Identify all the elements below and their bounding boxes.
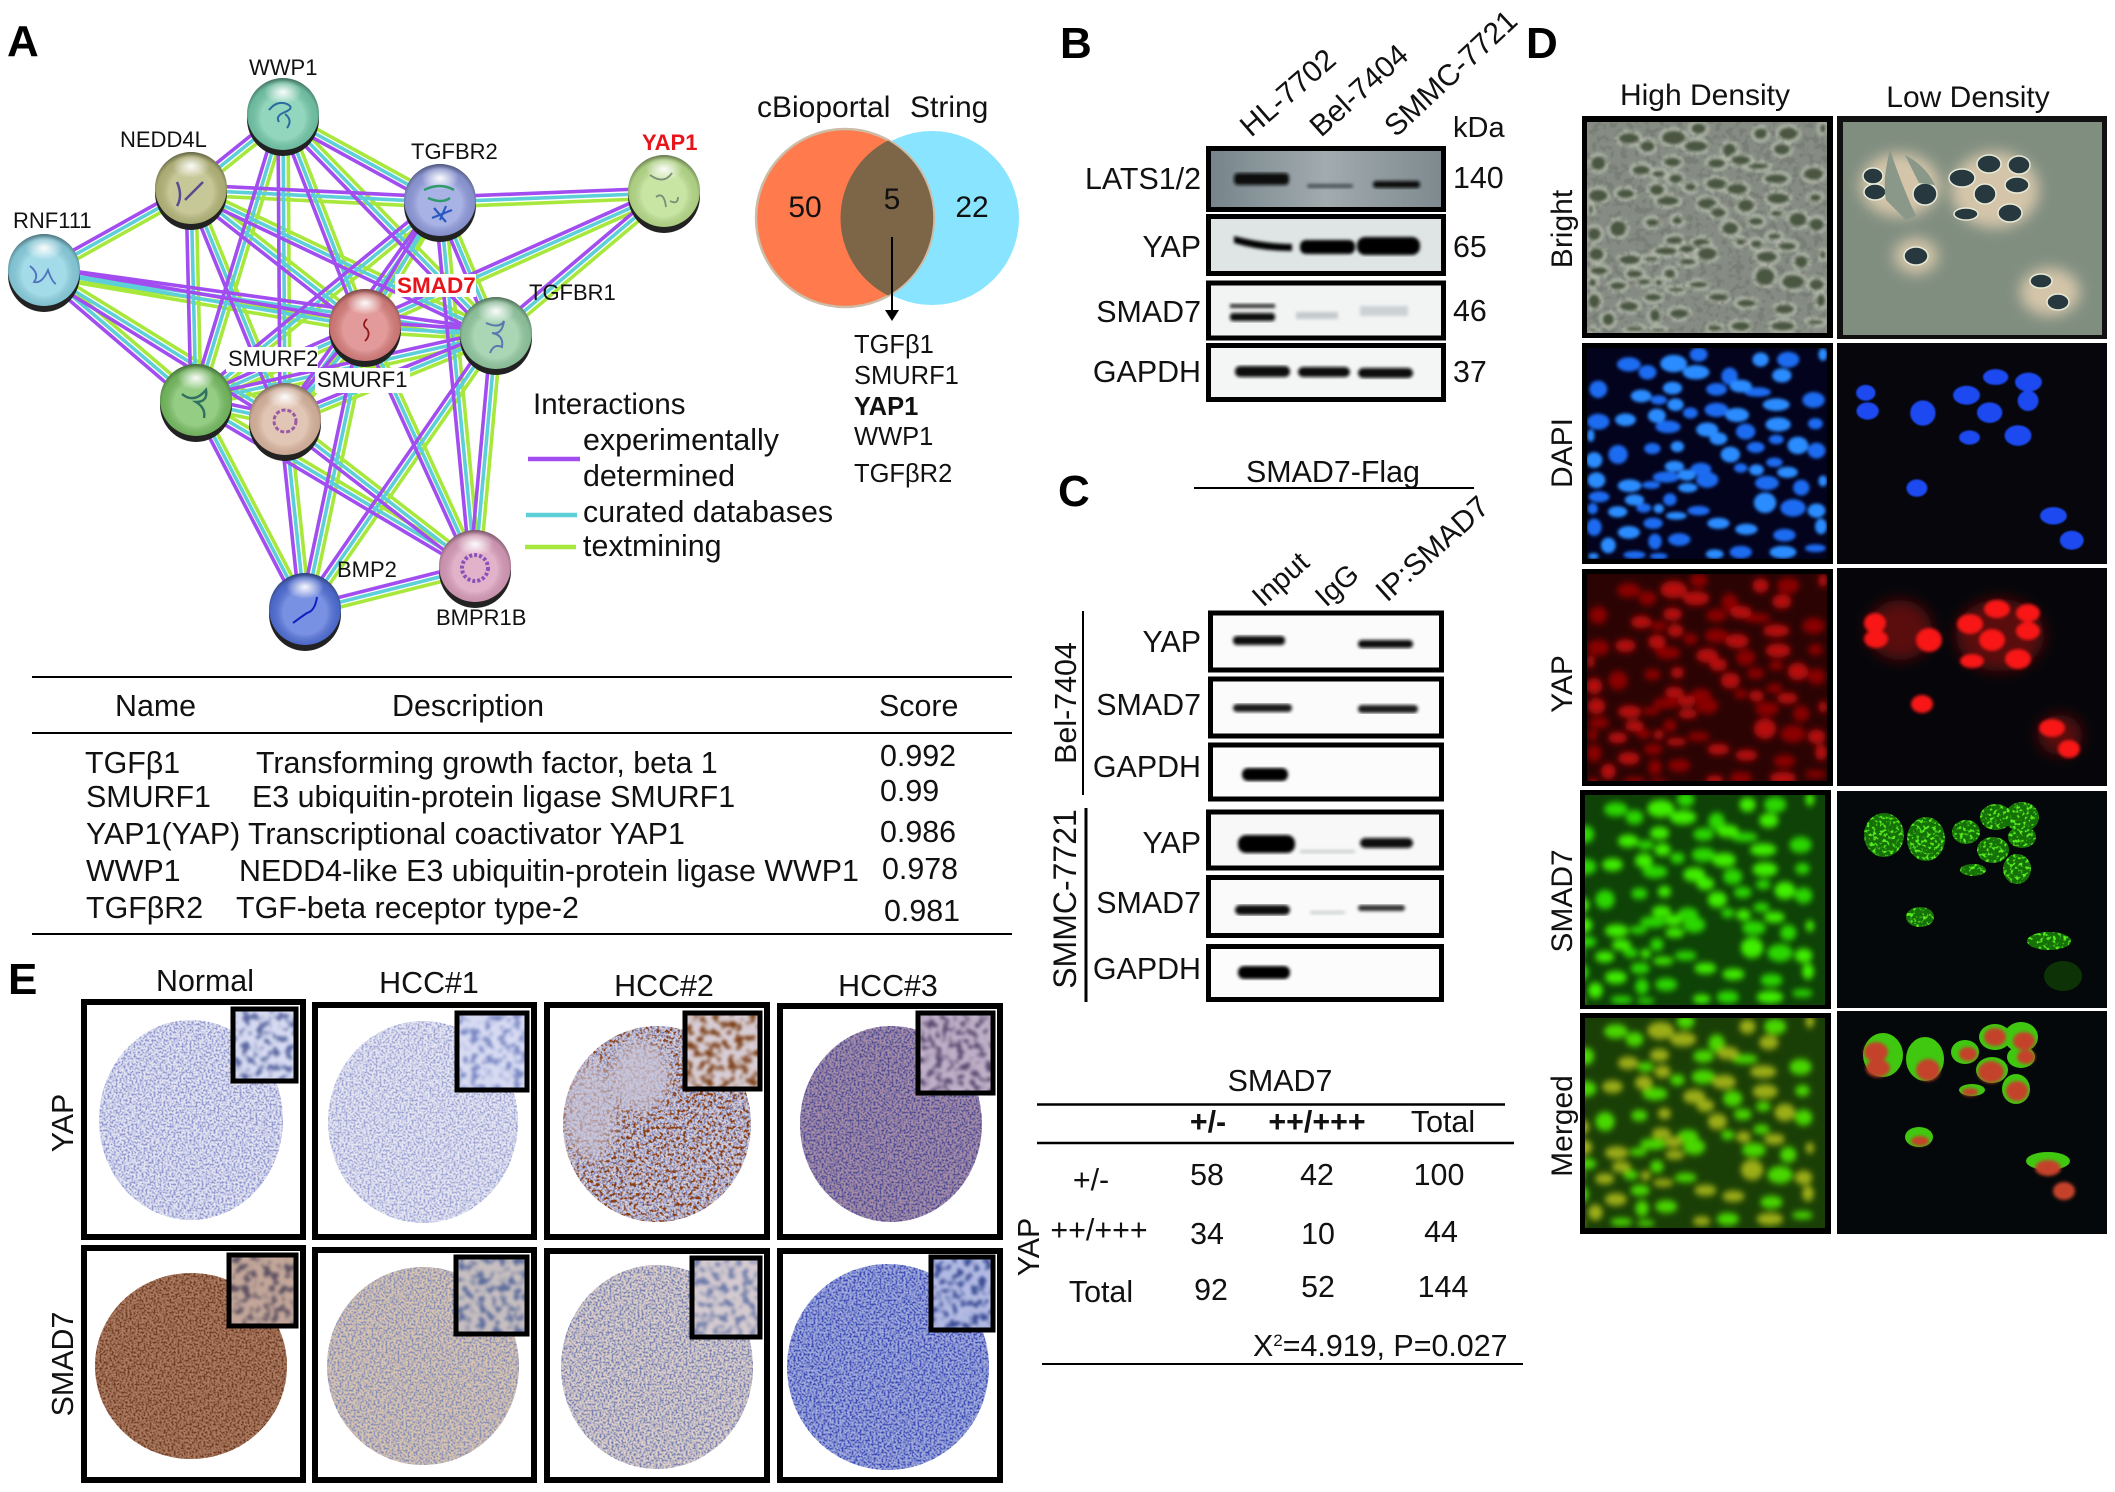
tissue SMAD7 Normal — [84, 1248, 303, 1480]
inset — [229, 1255, 296, 1326]
legend: interactions: textmining — [583, 529, 722, 563]
blot GAPDH: 37 — [1453, 355, 1487, 389]
table: protein name, description, score: TGFβ1 — [85, 746, 180, 780]
lane labels: HL-7702 — [1234, 43, 1342, 143]
Venn diagram: cBioportal — [757, 91, 890, 124]
contingency table: YAP vs SMAD7: ++/+++ — [1050, 1213, 1148, 1247]
tissue YAP HCC#1 — [315, 1005, 534, 1237]
blot Bel-7404 GAPDH — [1093, 745, 1442, 799]
contingency table: YAP vs SMAD7: 52 — [1301, 1270, 1335, 1304]
row labels: Merged — [1546, 1075, 1579, 1177]
column headers: HCC#3 — [838, 969, 938, 1003]
contingency table: YAP vs SMAD7: 10 — [1301, 1217, 1335, 1251]
row labels: YAP — [46, 1094, 80, 1152]
inset — [685, 1013, 760, 1089]
tissue SMAD7 HCC#2 — [547, 1251, 767, 1480]
node labels: SMURF2 — [228, 346, 318, 371]
contingency table: YAP vs SMAD7: +/- — [1190, 1105, 1226, 1139]
node labels: BMP2 — [337, 557, 397, 582]
blot Bel-7404 GAPDH: GAPDH — [1093, 750, 1201, 784]
lane labels: Input — [1246, 546, 1316, 613]
table: protein name, description, score: 0.99 — [880, 774, 939, 808]
node labels: WWP1 — [249, 55, 317, 80]
image: SMAD7 low density — [1837, 791, 2107, 1008]
image: merged low density — [1837, 1011, 2107, 1234]
table: protein name, description, score: YAP1(YAP) — [86, 817, 240, 851]
lane labels: IP:SMAD7 — [1370, 490, 1496, 608]
blot SMMC-7721 SMAD7: SMAD7 — [1096, 886, 1201, 920]
contingency table: YAP vs SMAD7: 144 — [1418, 1270, 1468, 1304]
node YAP1 — [628, 155, 700, 233]
node BMP2 — [269, 573, 341, 651]
table: protein name, description, score: 0.981 — [884, 894, 960, 928]
network edges — [40, 112, 668, 616]
contingency table: YAP vs SMAD7: +/- — [1073, 1163, 1109, 1197]
node WWP1 — [247, 78, 319, 156]
image: bright low density — [1837, 116, 2107, 339]
Venn diagram: 5 — [884, 183, 900, 216]
node SMURF1 — [249, 383, 321, 461]
legend: interactions: Interactions — [533, 388, 686, 421]
inset — [918, 1013, 993, 1093]
column headers: HCC#2 — [614, 969, 714, 1003]
overlap gene list: TGFβR2 — [854, 460, 952, 488]
node labels: TGFBR1 — [529, 280, 616, 305]
contingency table: YAP vs SMAD7: 58 — [1190, 1158, 1224, 1192]
image: YAP high density — [1582, 569, 1833, 786]
Venn diagram: String — [910, 91, 988, 124]
table: protein name, description, score: Score — [879, 689, 958, 723]
node labels: BMPR1B — [436, 605, 526, 630]
table: protein name, description, score: 0.986 — [880, 815, 956, 849]
column headers: High Density — [1620, 79, 1790, 112]
row labels: Bright — [1546, 189, 1579, 268]
network: STRING protein interactions — [8, 55, 700, 651]
inset — [457, 1013, 527, 1090]
blot SMMC-7721 YAP — [1142, 812, 1442, 868]
table: protein name, description, score: E3 ubiquitin-protein ligase SMURF1 — [252, 780, 735, 814]
overlap gene list: SMURF1 — [854, 362, 959, 390]
contingency table: YAP vs SMAD7: Total — [1411, 1105, 1475, 1139]
lane labels — [1234, 4, 1524, 144]
tissue YAP HCC#2 — [547, 1005, 767, 1237]
contingency table: YAP vs SMAD7: YAP — [1012, 1218, 1046, 1276]
node labels: SMAD7 — [397, 273, 476, 298]
blot Bel-7404 SMAD7: SMAD7 — [1096, 688, 1201, 722]
node labels: NEDD4L — [120, 127, 207, 152]
blot SMMC-7721 YAP: YAP — [1142, 826, 1201, 860]
lane labels: IgG — [1309, 558, 1365, 613]
row labels — [1546, 189, 1579, 1177]
row labels: DAPI — [1546, 418, 1579, 488]
lane labels — [1246, 490, 1496, 613]
arrow from overlap to gene list — [885, 237, 899, 321]
table: protein name, description, score — [32, 677, 1012, 934]
column headers: HCC#1 — [379, 966, 479, 1000]
legend: interactions — [525, 388, 833, 563]
panel C: co-immunoprecipitation — [1047, 455, 1496, 1002]
contingency table: YAP vs SMAD7: X — [1253, 1329, 1273, 1363]
row labels — [46, 1094, 80, 1416]
row labels: YAP — [1546, 655, 1579, 713]
overlap gene list: YAP1 — [854, 393, 918, 421]
image: bright high density — [1582, 116, 1833, 338]
blot SMMC-7721 GAPDH — [1093, 946, 1442, 1000]
contingency table: YAP vs SMAD7: =4.919, P=0.027 — [1283, 1329, 1508, 1363]
blot LATS1/2: LATS1/2 — [1085, 162, 1201, 196]
node TGFBR2 — [404, 164, 476, 242]
node labels: TGFBR2 — [411, 139, 498, 164]
panel letter D: D — [1526, 19, 1558, 68]
contingency table: YAP vs SMAD7: 100 — [1414, 1158, 1464, 1192]
table: protein name, description, score: NEDD4-like E3 ubiquitin-protein ligase WWP1 — [239, 854, 859, 888]
blot Bel-7404 YAP: YAP — [1142, 625, 1201, 659]
overlap gene list: TGFβ1 — [854, 331, 934, 359]
blot YAP: YAP — [1142, 230, 1201, 264]
node BMPR1B — [439, 530, 511, 608]
contingency table: YAP vs SMAD7: ++/+++ — [1268, 1105, 1366, 1139]
blot SMAD7 — [1096, 283, 1487, 338]
legend: interactions: experimentally — [583, 423, 780, 457]
table: protein name, description, score: SMURF1 — [86, 780, 211, 814]
image: SMAD7 high density — [1573, 790, 1831, 1009]
row labels: SMAD7 — [1546, 849, 1579, 953]
table: protein name, description, score: 0.992 — [880, 739, 956, 773]
lane labels: Bel-7404 — [1304, 38, 1415, 143]
node NEDD4L — [155, 152, 227, 230]
column headers — [1620, 79, 2050, 114]
blot SMMC-7721 SMAD7 — [1096, 878, 1442, 936]
node TGFBR1 — [460, 297, 532, 375]
blot Bel-7404 YAP — [1142, 613, 1442, 670]
blot Bel-7404 SMAD7 — [1096, 679, 1442, 736]
blot GAPDH — [1093, 346, 1487, 400]
panel letter B: B — [1060, 19, 1092, 68]
table: protein name, description, score: TGFβR2 — [86, 891, 203, 925]
blot SMAD7: 46 — [1453, 294, 1487, 328]
image: DAPI low density — [1837, 343, 2107, 564]
inset — [692, 1258, 760, 1337]
panel letter E: E — [8, 955, 37, 1004]
blot SMMC-7721 GAPDH: GAPDH — [1093, 952, 1201, 986]
node RNF111 — [8, 234, 80, 312]
image: merged high density — [1573, 1013, 1831, 1234]
column headers — [156, 964, 938, 1003]
lane labels: kDa — [1453, 112, 1505, 144]
table: protein name, description, score: WWP1 — [86, 854, 181, 888]
blot LATS1/2 — [1085, 148, 1504, 210]
contingency table: YAP vs SMAD7: Total — [1069, 1275, 1133, 1309]
table: protein name, description, score: Transcriptional coactivator YAP1 — [248, 817, 685, 851]
blot GAPDH: GAPDH — [1093, 355, 1201, 389]
blot LATS1/2: 140 — [1453, 161, 1504, 195]
inset — [931, 1257, 993, 1330]
contingency table: YAP vs SMAD7: 92 — [1194, 1273, 1228, 1307]
table: protein name, description, score: Transforming growth factor, beta 1 — [256, 746, 718, 780]
contingency table: YAP vs SMAD7: 44 — [1424, 1215, 1458, 1249]
table: protein name, description, score: TGF-beta receptor type-2 — [236, 891, 579, 925]
node SMURF2 — [160, 364, 232, 442]
panel letter A: A — [7, 17, 39, 66]
tissue SMAD7 HCC#1 — [315, 1250, 534, 1480]
panel B: western blots — [1060, 4, 1524, 400]
Venn diagram — [756, 91, 1019, 321]
image: YAP low density — [1837, 568, 2107, 786]
panel letter C: C — [1058, 467, 1090, 516]
tissue SMAD7 HCC#3 — [780, 1251, 1000, 1480]
legend: interactions: curated databases — [583, 495, 833, 529]
inset — [233, 1009, 296, 1081]
blot YAP — [1142, 216, 1487, 274]
lane labels: SMMC-7721 — [1378, 4, 1524, 143]
node labels: YAP1 — [642, 130, 697, 155]
cell line label SMMC-7721: SMMC-7721 — [1047, 809, 1083, 989]
column headers: Normal — [156, 964, 254, 998]
overlap gene list: WWP1 — [854, 423, 933, 451]
overlap gene list — [854, 331, 959, 488]
panel E: tissue microarray staining — [8, 955, 1000, 1480]
column headers: Low Density — [1886, 81, 2050, 114]
node labels: RNF111 — [13, 208, 92, 233]
table: protein name, description, score: Description — [392, 689, 544, 723]
Venn diagram: 50 — [788, 191, 822, 224]
row labels: SMAD7 — [46, 1312, 80, 1416]
node labels: SMURF1 — [317, 367, 407, 392]
SMAD7-Flag header: SMAD7-Flag — [1246, 455, 1420, 489]
contingency table: YAP vs SMAD7: SMAD7 — [1228, 1064, 1332, 1098]
Venn diagram: 22 — [955, 191, 989, 224]
inset — [456, 1257, 527, 1334]
contingency table: YAP vs SMAD7: 42 — [1300, 1158, 1334, 1192]
contingency table: YAP vs SMAD7: 2 — [1273, 1331, 1283, 1350]
tissue YAP Normal — [84, 1002, 303, 1237]
cell line label Bel-7404: Bel-7404 — [1049, 642, 1083, 764]
image: DAPI high density — [1582, 343, 1833, 564]
panel D: immunofluorescence grid — [1526, 19, 2107, 1234]
tissue YAP HCC#3 — [780, 1006, 1000, 1237]
contingency table: YAP vs SMAD7 — [1012, 1064, 1523, 1364]
panel A: interaction network, Venn diagram and table — [7, 17, 1019, 934]
contingency table: YAP vs SMAD7: 34 — [1190, 1217, 1224, 1251]
blot YAP: 65 — [1453, 230, 1487, 264]
node SMAD7 — [329, 289, 401, 367]
blot SMAD7: SMAD7 — [1096, 295, 1201, 329]
node labels — [13, 55, 697, 630]
table: protein name, description, score: 0.978 — [882, 852, 958, 886]
legend: interactions: determined — [583, 459, 735, 493]
table: protein name, description, score: Name — [115, 689, 196, 723]
